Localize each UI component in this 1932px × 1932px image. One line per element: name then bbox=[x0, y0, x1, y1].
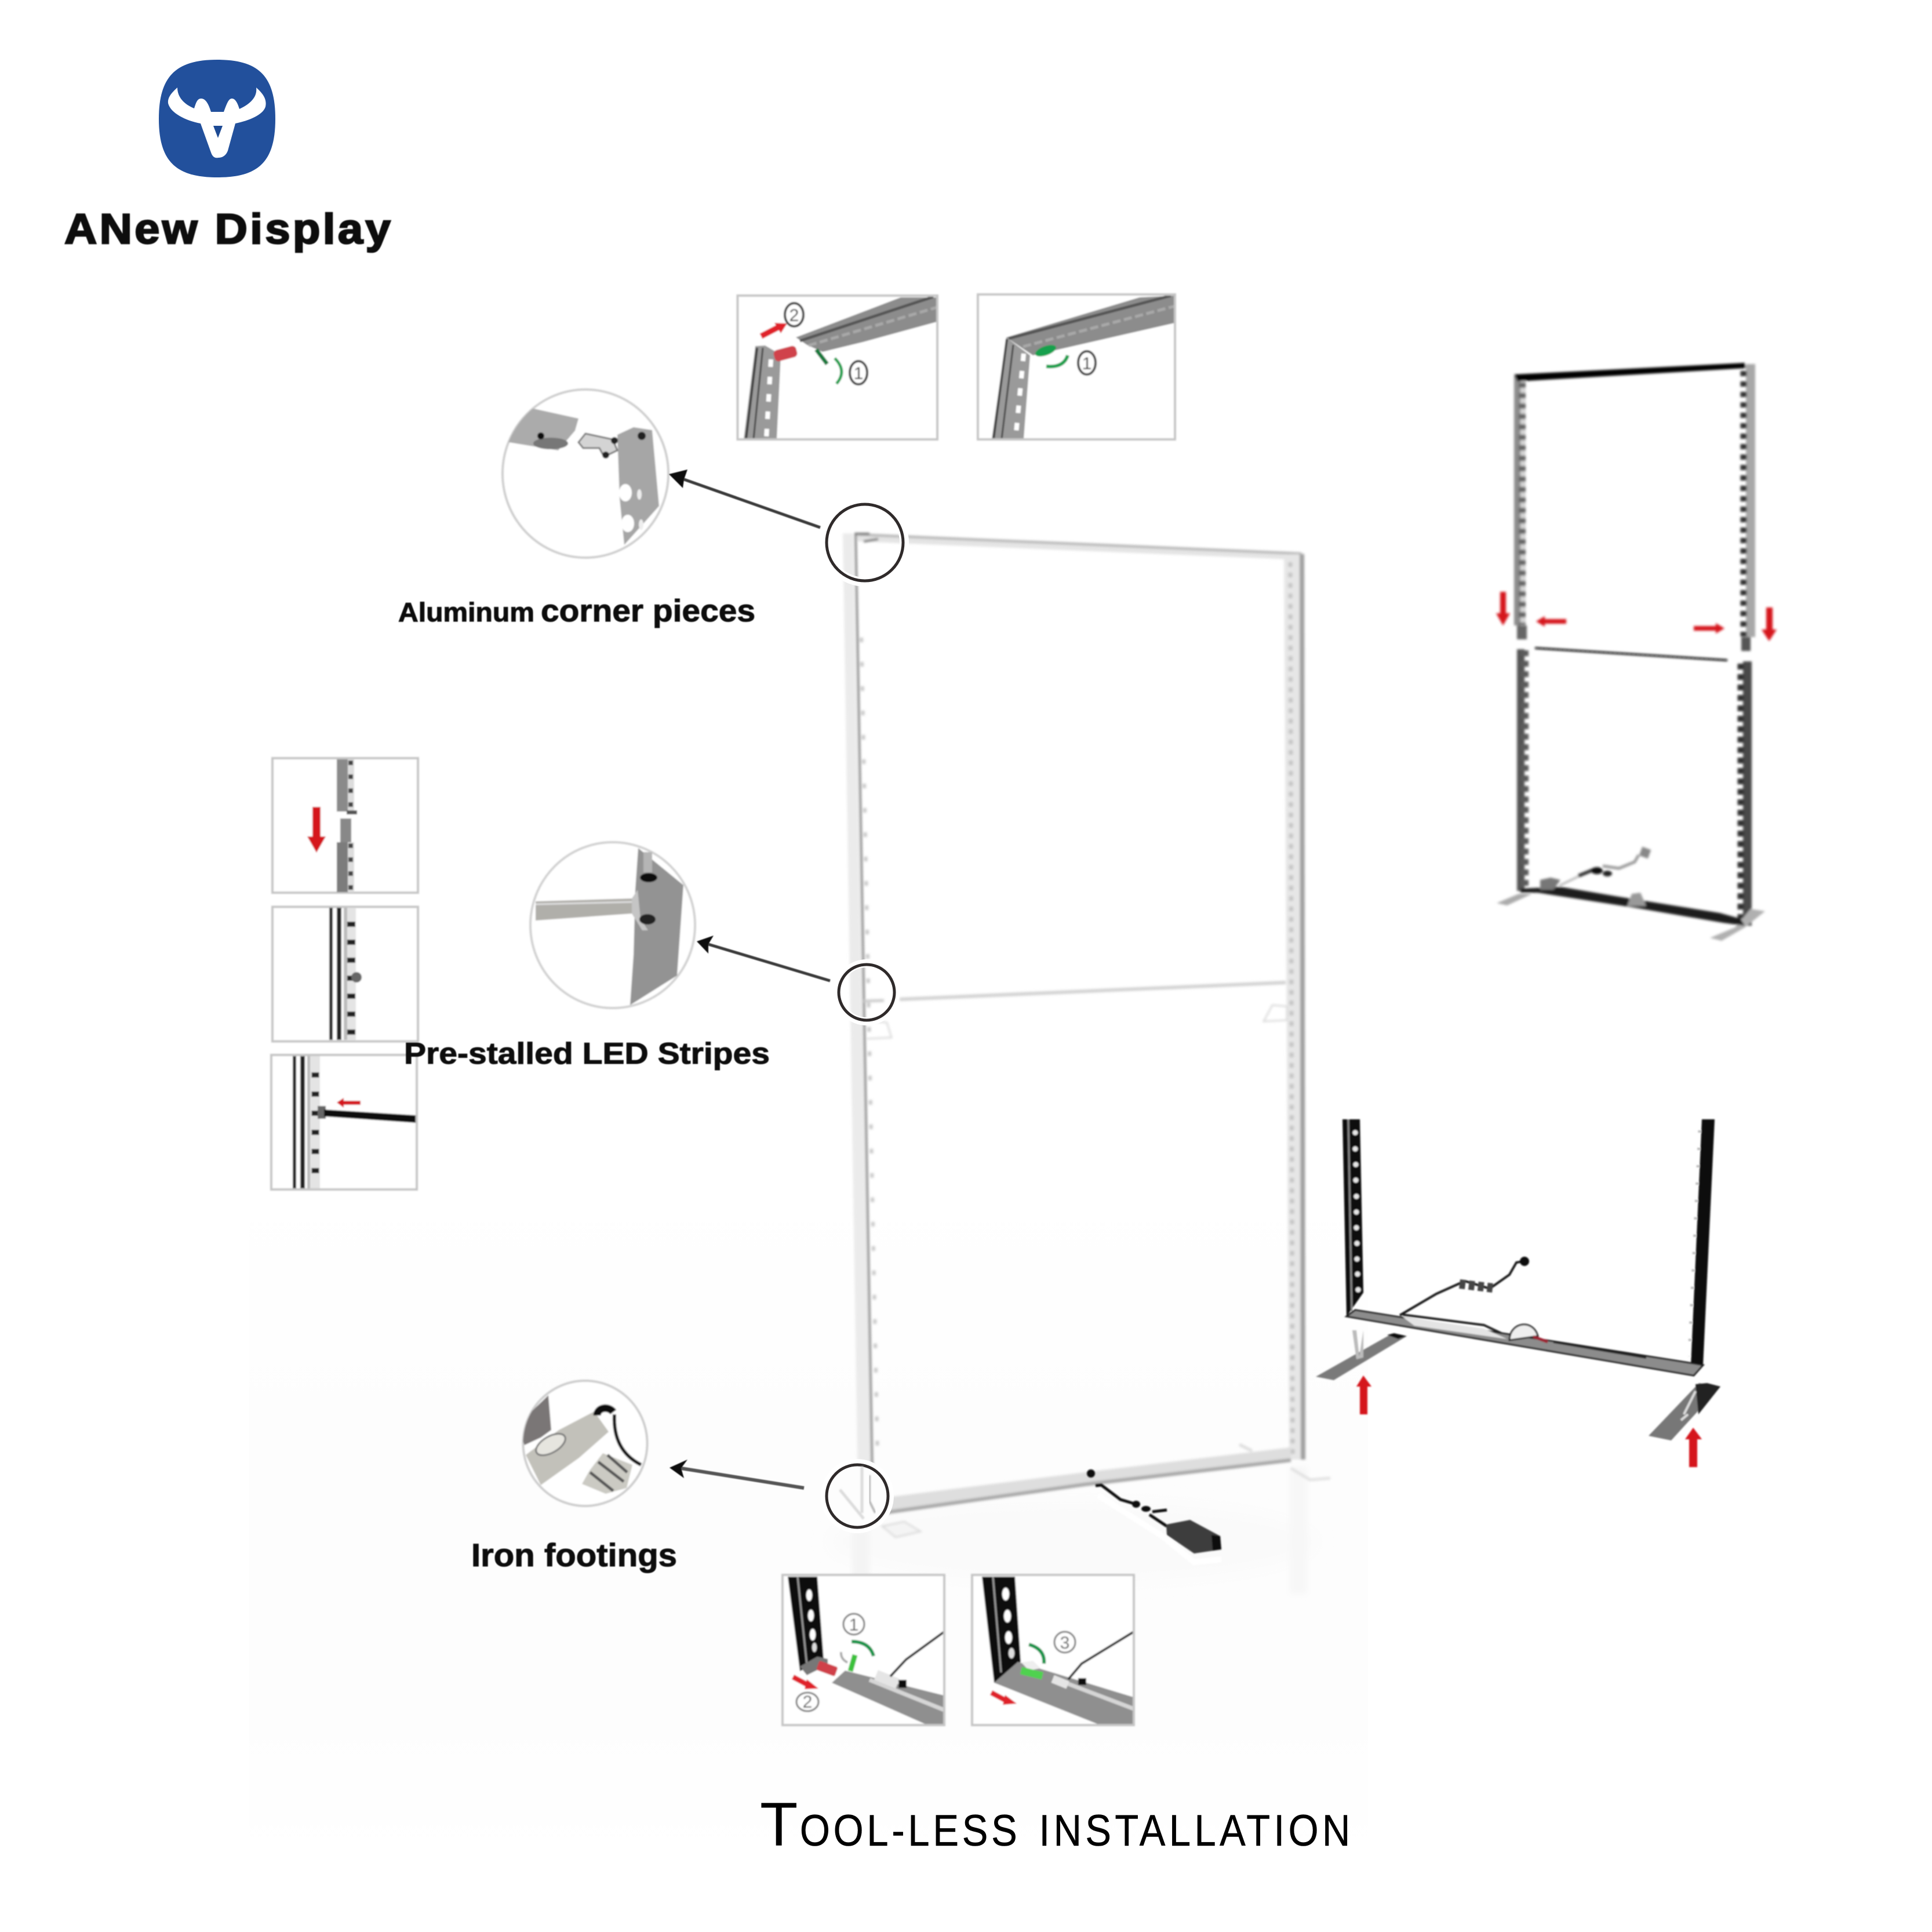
mid rail bbox=[1535, 648, 1727, 660]
right post bbox=[1691, 1119, 1715, 1374]
panel: footing step 2 bbox=[972, 1575, 1134, 1725]
bottom rail bbox=[1520, 887, 1745, 926]
box B bbox=[272, 907, 418, 1041]
clips bbox=[867, 1021, 892, 1039]
panel: corner step 2 bbox=[978, 294, 1175, 439]
locator circle: mid joint bbox=[838, 963, 896, 1021]
arrow: corner pieces bbox=[669, 470, 820, 527]
cable bbox=[890, 1632, 944, 1676]
bottom rail bbox=[887, 1447, 1291, 1514]
green marks bbox=[1034, 343, 1058, 359]
title: OOL-LESS bbox=[800, 1806, 1017, 1855]
panel: LED stripes steps bbox=[271, 758, 418, 1189]
red arrow bbox=[761, 328, 778, 336]
green marks bbox=[1020, 1667, 1043, 1679]
green marks bbox=[852, 1642, 874, 1656]
title bbox=[760, 1789, 1350, 1859]
feet bbox=[1497, 894, 1532, 905]
right post lower bbox=[1743, 661, 1752, 926]
side rail with LEDs bbox=[992, 337, 1030, 439]
logo wordmark: ANew Display bbox=[64, 206, 393, 253]
side rail with LEDs bbox=[744, 345, 781, 439]
cable bbox=[1559, 876, 1578, 886]
locator circle: top corner bbox=[825, 503, 904, 582]
title: T bbox=[760, 1789, 798, 1859]
panel: footing step 1 bbox=[783, 1575, 944, 1725]
mid beam bbox=[900, 983, 1286, 999]
red parts and arrow bbox=[793, 1677, 809, 1686]
cable bbox=[1400, 1261, 1526, 1315]
panel: footing step 1: 1 bbox=[849, 1616, 858, 1635]
arrow: LED stripes bbox=[697, 936, 830, 981]
diagram: base and footing assembly bbox=[1316, 1119, 1720, 1467]
top rail bbox=[796, 297, 937, 352]
step number bbox=[1078, 351, 1096, 374]
main light box frame bbox=[843, 533, 1330, 1537]
step numbers bbox=[843, 1614, 864, 1635]
connector bbox=[1509, 1325, 1538, 1340]
post LEDs bbox=[1353, 1130, 1361, 1293]
box A bbox=[272, 758, 418, 893]
panel: corner step 1: 2 bbox=[789, 306, 799, 325]
box C bbox=[271, 1055, 417, 1189]
red arrow bbox=[991, 1693, 1007, 1701]
feet bbox=[882, 1522, 920, 1537]
right post upper bbox=[1746, 364, 1755, 637]
bottom rail bbox=[832, 1671, 944, 1725]
magnifier: LED stripes bbox=[530, 842, 695, 1008]
label: aluminum corner pieces bbox=[398, 594, 755, 628]
panel: footing step 1: 2 bbox=[803, 1693, 812, 1712]
right post bbox=[1284, 554, 1305, 1460]
top bar bbox=[1514, 363, 1746, 381]
arrow: iron footings bbox=[670, 1460, 804, 1488]
top rail bbox=[854, 534, 1304, 560]
panel: corner step 1 bbox=[737, 296, 937, 439]
label: aluminum corner pieces: Aluminum bbox=[398, 597, 534, 627]
left post lower bbox=[1517, 649, 1525, 891]
left post bbox=[843, 533, 872, 1525]
panel: footing step 2: 3 bbox=[1060, 1633, 1069, 1653]
background: faint floor area bbox=[249, 1188, 1368, 1855]
side post bbox=[788, 1577, 824, 1671]
diagram: two-piece frame assembly bbox=[1496, 363, 1777, 941]
panel: corner step 1: 1 bbox=[854, 364, 863, 383]
panel: corner step 2: 1 bbox=[1082, 354, 1091, 373]
locator circle: foot bbox=[825, 1463, 890, 1529]
step numbers bbox=[850, 361, 867, 384]
step number bbox=[1054, 1632, 1075, 1653]
label: LED stripes: Pre-stalled LED Stripes bbox=[404, 1037, 770, 1071]
title: INSTALLATION bbox=[1039, 1806, 1350, 1855]
red arrows bbox=[1496, 592, 1510, 625]
cable bbox=[1068, 1632, 1134, 1679]
power cable and adapter bbox=[1087, 1469, 1221, 1562]
left post bbox=[1342, 1119, 1363, 1316]
bottom rail bbox=[1347, 1310, 1703, 1376]
side post bbox=[982, 1577, 1021, 1683]
bottom rail bbox=[994, 1662, 1134, 1725]
red arrows bbox=[1356, 1376, 1371, 1414]
logo: bull head icon bbox=[159, 60, 275, 177]
top rail bbox=[1006, 296, 1175, 355]
left foot bbox=[1316, 1334, 1407, 1380]
left post upper bbox=[1514, 376, 1520, 625]
magnifier: iron footings bbox=[519, 1381, 647, 1506]
label: iron footings: Iron footings bbox=[471, 1537, 677, 1573]
right foot bbox=[1649, 1383, 1720, 1440]
green marks bbox=[816, 350, 827, 364]
label: aluminum corner pieces: corner pieces bbox=[541, 594, 755, 628]
corner detail bbox=[854, 534, 878, 541]
magnifier: aluminum corner pieces bbox=[499, 390, 668, 558]
